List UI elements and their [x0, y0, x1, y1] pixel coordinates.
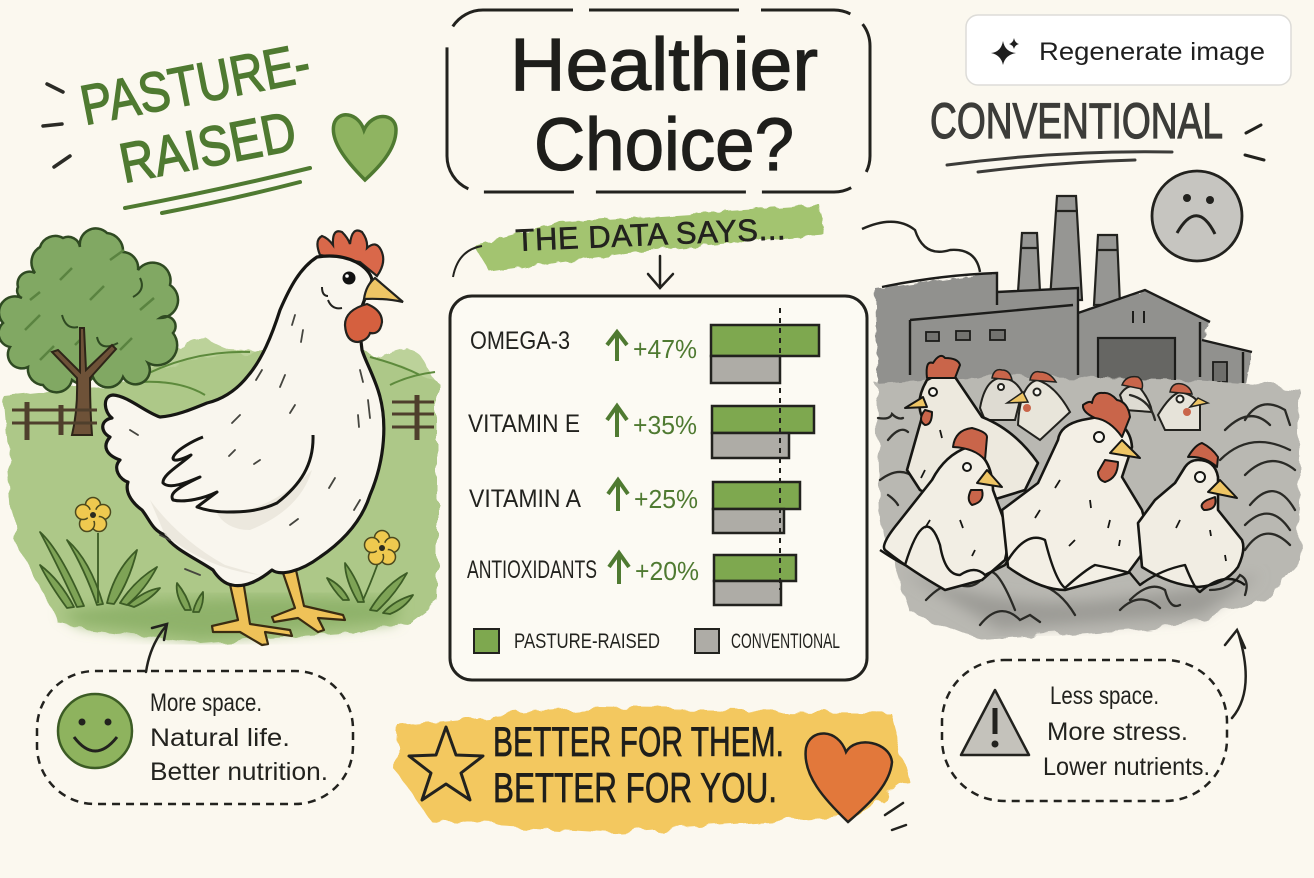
legs: [212, 570, 345, 645]
row: Omega-3: [470, 325, 819, 383]
windows: [926, 330, 1005, 341]
heading: Conventional: CONVENTIONAL: [930, 93, 1223, 149]
row: Vitamin A: [469, 480, 800, 533]
hills: [130, 337, 437, 400]
icon: sparkle: [991, 38, 1019, 65]
crowd ground: [876, 376, 1300, 640]
legend: [474, 629, 840, 653]
heading: Conventional: [930, 93, 1223, 172]
tree: [0, 228, 178, 435]
title: Healthier Choice?: Healthier: [510, 23, 818, 106]
door: [1098, 338, 1175, 382]
fence: [12, 395, 434, 440]
icon: orange heart: [806, 733, 892, 822]
field: [3, 352, 437, 643]
texture lines: [878, 395, 1295, 625]
eye: [342, 272, 356, 284]
icon: star: [409, 727, 483, 800]
banner: better for them: BETTER FOR YOU.: [493, 764, 777, 811]
row: Vitamin A: +25%: [634, 484, 698, 514]
row: Vitamin A: VITAMIN A: [469, 485, 581, 513]
callout: pasture benefits: Better nutrition.: [150, 758, 328, 786]
callout: conventional drawbacks: More stress.: [1047, 718, 1188, 746]
row: Antioxidants: ANTIOXIDANTS: [467, 556, 597, 584]
illustration: pasture scene: [0, 228, 437, 645]
icon: sad face: [1152, 171, 1242, 261]
callout: pasture benefits: More space.: [150, 689, 262, 717]
illustration: factory farm: [862, 196, 1300, 640]
row: Vitamin E: +35%: [633, 410, 697, 440]
icon: warning triangle: [961, 690, 1029, 755]
accent marks: left of heading: [43, 84, 70, 167]
chicken: [103, 230, 403, 645]
hill lines: [135, 352, 435, 395]
feather shading: [150, 470, 312, 575]
heading: Pasture-Raised: PASTURE-: [75, 31, 315, 137]
hen C: [1002, 417, 1146, 590]
callout: pasture benefits: Natural life.: [150, 724, 290, 752]
beak: [364, 278, 403, 302]
arrow: down to chart: [648, 256, 673, 288]
panel: nutrient chart: [450, 296, 867, 680]
flowers: [76, 498, 400, 564]
field shadow: [60, 597, 400, 640]
heading: Pasture-Raised: RAISED: [114, 99, 301, 195]
wing: [163, 435, 313, 512]
main wash: [875, 273, 1252, 390]
smoke line: [862, 222, 980, 272]
wattle: [345, 304, 382, 342]
chimneys: [1018, 196, 1120, 305]
heading: Pasture-Raised: [75, 31, 315, 213]
hen A: [907, 374, 1038, 510]
comb: [317, 230, 383, 276]
hen D: [1138, 460, 1243, 587]
hen B: [884, 447, 1008, 590]
arrow: to pasture scene: [146, 624, 167, 672]
banner: better for them: [395, 708, 908, 832]
feather marks: [130, 315, 370, 575]
row: Omega-3: +47%: [633, 334, 697, 364]
callout: conventional drawbacks: [942, 660, 1227, 801]
factory: [875, 196, 1252, 390]
back chickens: [980, 378, 1200, 440]
legend: PASTURE-RAISED: [514, 630, 660, 653]
body: [103, 256, 384, 586]
banner: better for them: BETTER FOR THEM.: [493, 718, 784, 765]
arrow: to factory farm: [1225, 630, 1246, 718]
title: Healthier Choice?: Choice?: [534, 103, 794, 186]
row: Vitamin E: VITAMIN E: [468, 410, 580, 438]
callout: pasture benefits: [37, 671, 353, 804]
callout: conventional drawbacks: Less space.: [1050, 682, 1159, 710]
legend: CONVENTIONAL: [731, 630, 840, 653]
row: Omega-3: OMEGA-3: [470, 327, 570, 355]
row: Antioxidants: [467, 553, 796, 605]
icon: green heart: [333, 115, 396, 180]
chickens: [880, 356, 1245, 592]
banner: The data says: [453, 205, 824, 277]
button: Regenerate image: [966, 15, 1291, 85]
icon: smiley: [58, 694, 132, 768]
feather marks: [921, 430, 1226, 561]
row: Vitamin E: [468, 406, 814, 458]
row: Antioxidants: +20%: [635, 556, 699, 586]
grass blades: [40, 532, 413, 614]
accent marks: right of heading: [1245, 125, 1264, 160]
smile marks: [322, 287, 342, 308]
litter tufts: [880, 527, 1245, 592]
callout: conventional drawbacks: Lower nutrients.: [1043, 753, 1210, 781]
button: Regenerate image: Regenerate image: [1039, 38, 1265, 66]
banner: The data says: THE DATA SAYS...: [515, 211, 786, 258]
title: Healthier Choice?: [447, 10, 870, 192]
